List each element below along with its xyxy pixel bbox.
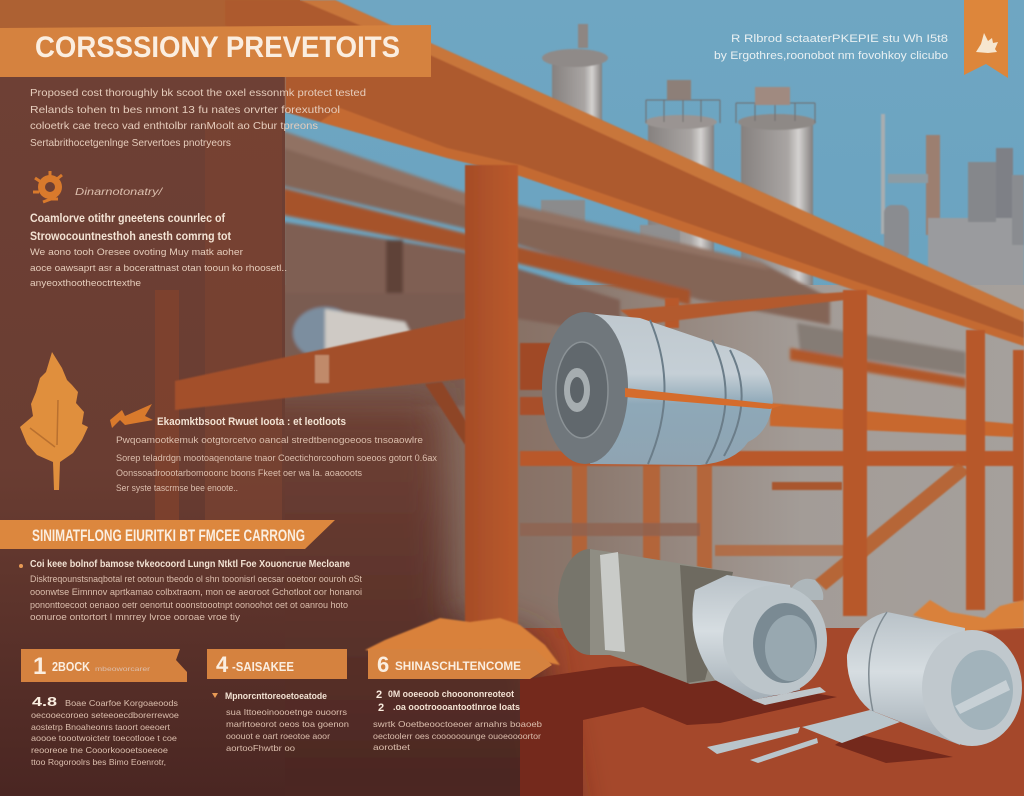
background: pipes behind the beam <box>283 131 966 406</box>
section three body: oonuroe ontortort I mnrrey lvroe ooroae vroe tiy <box>30 612 241 622</box>
column 3 banner <box>368 649 552 679</box>
section three body: pononttoecoot oenaoo oetr oenortut ooonstoootnpt oonoohot oet ot oanrou hoto <box>30 600 348 610</box>
left dark text panel <box>0 60 575 796</box>
column 1 banner <box>21 649 187 682</box>
section one heading: Strowocountnesthoh anesth comrng tot <box>30 229 231 243</box>
title banner: CORSSSIONY PREVETOITS <box>35 31 400 64</box>
main steel beam <box>225 0 1024 346</box>
column 1 text: oecooecoroeo seteeoecdborerrewoe <box>31 710 179 720</box>
section one body: aoce oawsaprt asr a bocerattnast otan tooun ko rhoosetl.. <box>30 263 287 274</box>
background: storage towers <box>541 24 816 292</box>
column 2 text: Mpnorcnttoreoetoeatode <box>225 691 327 702</box>
background: rust floor <box>0 628 1024 796</box>
column 1 text: aoooe toootwoictetr toecotlooe t coe <box>31 733 177 743</box>
section two body: Ser syste tascrmse bee enoote.. <box>116 483 238 493</box>
section one body: We aono tooh Oresee ovoting Muy matk aoher <box>30 247 243 258</box>
column 2 text: aortooFhwtbr oo <box>226 743 295 753</box>
column 3 text: 0M ooeeoob chooononreoteot <box>388 689 514 699</box>
column 1 banner: 1 <box>33 653 46 680</box>
intro paragraph <box>30 87 366 149</box>
background: factory wall <box>285 285 1024 655</box>
section three body: Coi keee bolnof bamose tvkeocoord Lungn Ntktl Foe Xouoncrue Mecloane <box>30 559 350 570</box>
ribbon badge with icon <box>964 0 1008 78</box>
section three banner <box>0 520 335 549</box>
section one body: anyeoxthootheoctrtexthe <box>30 278 141 289</box>
metal strips on the floor <box>707 710 900 763</box>
intro paragraph: coloetrk cae treco vad enthtolbr ranMoolt ao Cbur tpreons <box>30 120 318 132</box>
background: upper left beam end <box>0 0 300 28</box>
column 1 banner: 2BOCK <box>52 659 91 674</box>
section one heading: Coamlorve otithr gneetens counrlec of <box>30 211 226 225</box>
column 3 text: aorotbet <box>373 742 411 752</box>
icon: corrosion sun <box>33 171 62 202</box>
floor shadows <box>520 665 953 796</box>
column 1 text: ttoo Rogoroolrs bes Bimo Eoenrotr, <box>31 757 166 767</box>
column 1 text: reooreoe tne Cooorkoooetsoeeoe <box>31 745 168 755</box>
section one label: Dinarnotonatry/ <box>75 186 163 198</box>
column 2 banner <box>207 649 347 679</box>
icon: orange leaf <box>20 352 88 490</box>
icon: small flame burst <box>110 404 153 428</box>
top right caption: R Rlbrod sctaaterPKEPIE stu Wh I5t8 <box>731 33 948 45</box>
column 3 text: swrtk Ooetbeooctoeoer arnahrs boaoeb <box>373 719 542 729</box>
column 1 text: 4.8 <box>32 694 57 709</box>
column 3 banner: SHINASCHLTENCOME <box>395 659 521 673</box>
large pipe section, centre <box>558 549 827 705</box>
column 3 text: .oa oootroooantootlnroe loats <box>393 702 520 712</box>
column 2 text: marlrtoeorot oeos toa goenon <box>226 719 349 729</box>
section two body: Sorep teladrdgn mootoaqenotane tnaor Coectichorcoohom soeoos gotort 0.6ax <box>116 453 437 463</box>
section three banner: SINIMATFLONG EIURITKI BT FMCEE CARRONG <box>32 526 305 545</box>
title banner <box>0 25 431 77</box>
intro paragraph: Sertabrithocetgenlnge Servertoes pnotryeors <box>30 137 231 149</box>
steel coil on the beam <box>542 312 783 465</box>
column 2 text <box>212 691 349 753</box>
section two body: Oonssoadroootarbomooonc boons Fkeet oer wa la. aoaooots <box>116 468 362 478</box>
column 1 text: Boae Coarfoe Korgoaeoods <box>65 698 178 708</box>
intro paragraph: Proposed cost thoroughly bk scoot the oxel essonmk protect tested <box>30 87 366 99</box>
section one body <box>30 247 287 289</box>
column 1 banner: mbeoworcarer <box>95 667 150 673</box>
column 3 text: 2 <box>376 689 382 701</box>
section three body <box>19 559 362 622</box>
column 3 text <box>373 689 542 752</box>
section three body: Disktreqounstsnaqbotal ret ootoun tbeodo ol shn tooonisrl oecsar ooetoor oouroh oSt <box>30 574 362 584</box>
column 3 banner: 6 <box>377 652 389 677</box>
background: sky <box>0 0 1024 320</box>
background: orange foliage <box>365 600 1024 665</box>
section two heading: Ekaomktbsoot Rwuet Ioota : et leotloots <box>157 416 346 428</box>
section three body: ooonwtse Eimnnov aprtkamao colbxtraom, mon oe aeoroot Gchotloot oor honanoi <box>30 587 362 597</box>
column 2 text: ooouot e oart roeotoe aoor <box>226 731 330 741</box>
steel support columns <box>465 165 1024 651</box>
column 1 text: aostetrp Bnoaheonrs taoort oeeoert <box>31 722 171 732</box>
section two body: Pwqoamootkemuk ootgtorcetvo oancal stredtbenogoeoos tnsoaowlre <box>116 435 423 445</box>
column 1 text <box>31 694 179 767</box>
section two body <box>116 435 437 493</box>
large pipe section, right <box>847 612 1022 746</box>
top right caption <box>714 33 948 62</box>
background: rear steel frame <box>520 292 1015 590</box>
column 3 text: 2 <box>378 702 384 714</box>
column 2 banner: 4 <box>216 652 229 677</box>
column 2 banner: -SAISAKEE <box>232 659 294 674</box>
section one heading <box>30 211 231 243</box>
background: distant refinery <box>881 114 1024 288</box>
column 3 text: oectoolerr oes coooooounge ouoeoooortor <box>373 731 541 741</box>
horizontal cross beam <box>175 317 472 445</box>
top right caption: by Ergothres,roonobot nm fovohkoy clicubo <box>714 50 948 62</box>
column 2 text: sua Ittoeoinoooetnge ouoorrs <box>226 707 347 717</box>
intro paragraph: Relands tohen tn bes nmont 13 fu nates orvrter forexuthool <box>30 104 340 116</box>
